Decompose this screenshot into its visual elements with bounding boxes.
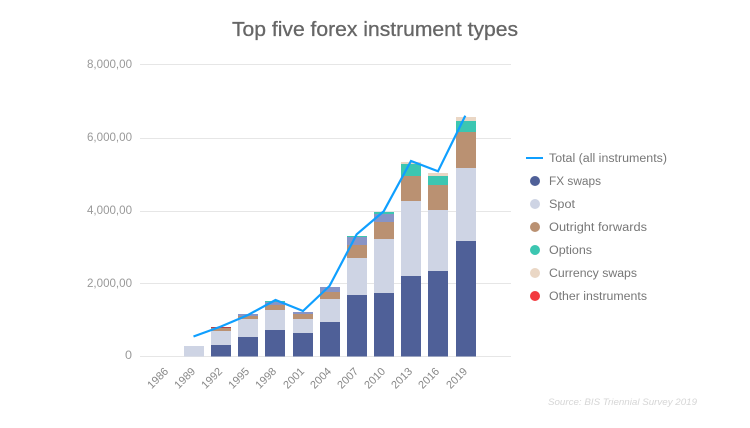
y axis labels xyxy=(87,59,132,362)
x axis labels: 2010 xyxy=(362,366,388,391)
x axis labels: 1998 xyxy=(253,366,279,391)
x axis labels: 1995 xyxy=(226,366,252,391)
legend: FX swaps: FX swaps xyxy=(549,176,601,188)
x axis labels: 2019 xyxy=(444,366,470,391)
y axis labels: 4,000,00 xyxy=(87,205,132,217)
x axis labels: 2013 xyxy=(389,366,415,391)
legend: spot xyxy=(530,199,576,211)
stacked bar chart xyxy=(184,117,476,356)
y axis labels: 8,000,00 xyxy=(87,59,132,71)
bar 2007 xyxy=(347,236,367,356)
y axis labels: 6,000,00 xyxy=(87,132,132,144)
title: Top five forex instrument types xyxy=(232,19,518,41)
bar 2010 xyxy=(374,212,394,356)
bar 2004 xyxy=(320,287,340,356)
total line xyxy=(194,116,465,336)
y axis labels: 0 xyxy=(125,350,132,362)
x axis labels: 1986 xyxy=(145,366,171,391)
legend: options: Options xyxy=(549,245,592,257)
bar 1989 xyxy=(184,346,204,356)
x axis labels: 1989 xyxy=(172,366,198,391)
x axis labels xyxy=(145,366,470,391)
x axis labels: 1992 xyxy=(199,366,225,391)
legend: other instruments: Other instruments xyxy=(549,291,647,303)
x axis labels: 2001 xyxy=(281,366,307,391)
source note: Source: BIS Triennial Survey 2019 xyxy=(548,397,698,408)
x axis labels: 2004 xyxy=(308,366,334,391)
legend: total: Total (all instruments) xyxy=(549,153,667,165)
legend: options xyxy=(530,245,592,257)
bar 1998 xyxy=(265,301,285,356)
legend: spot: Spot xyxy=(549,199,576,211)
bar 1995 xyxy=(238,314,258,356)
x axis labels: 2007 xyxy=(335,366,361,391)
legend xyxy=(526,153,667,303)
bar 2001 xyxy=(293,312,313,356)
bar 2013 xyxy=(401,162,421,356)
legend: currency swaps: Currency swaps xyxy=(549,268,637,280)
bar 1992 xyxy=(211,327,231,356)
bar 2016 xyxy=(428,173,448,356)
x axis labels: 2016 xyxy=(416,366,442,391)
bar 2019 xyxy=(456,117,476,356)
y axis labels: 2,000,00 xyxy=(87,278,132,290)
legend: outright forwards: Outright forwards xyxy=(549,222,647,234)
